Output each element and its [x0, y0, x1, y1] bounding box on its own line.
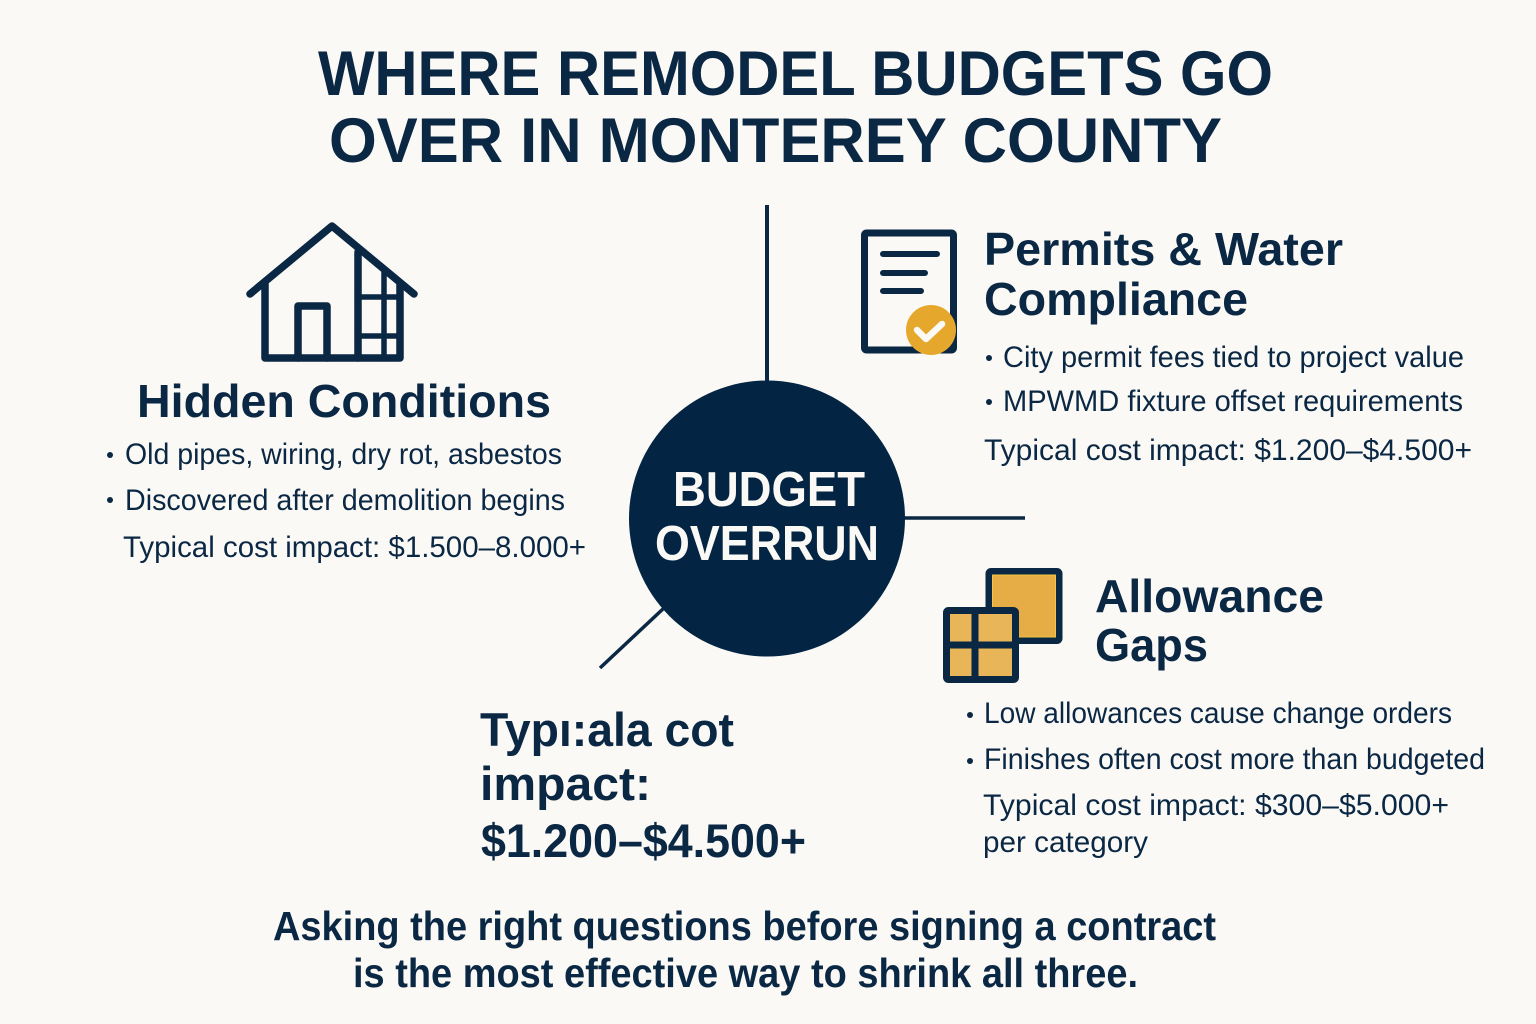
callout: typical cost impact — [480, 703, 806, 867]
connector: to typical cost — [600, 608, 664, 668]
bullet list: Old pipes, wiring, dry rot, asbestos — [125, 438, 562, 471]
footer message: Asking the right questions before signing a contract — [273, 903, 1216, 949]
panel: allowance gaps — [946, 570, 1485, 859]
icon: house with exposed framing — [250, 226, 414, 358]
footer message: is the most effective way to shrink all three. — [353, 950, 1138, 996]
heading: Permits & Water — [984, 223, 1343, 275]
bullet list — [986, 341, 1464, 418]
callout: typical cost impact: $1.200–$4.500+ — [481, 814, 806, 867]
callout: typical cost impact: Typı:ala cot — [480, 703, 734, 756]
title: WHERE REMODEL BUDGETS GO — [318, 39, 1273, 109]
footer message — [273, 903, 1216, 996]
bullet list — [967, 697, 1485, 776]
cost impact: Typical cost impact: $1.200–$4.500+ — [984, 434, 1472, 467]
icon: material swatches — [946, 572, 1059, 680]
bullet list: Finishes often cost more than budgeted — [984, 743, 1485, 776]
bullet list: MPWMD fixture offset requirements — [1003, 385, 1463, 418]
title: OVER IN MONTEREY COUNTY — [329, 106, 1222, 176]
panel: permits and water compliance — [864, 223, 1472, 467]
cost impact: per category — [983, 826, 1148, 859]
cost impact: Typical cost impact: $1.500–8.000+ — [123, 531, 586, 564]
connector: to allowance gaps — [900, 516, 1025, 520]
central hub: budget overrun: BUDGET — [673, 463, 865, 517]
callout: typical cost impact: impact: — [480, 757, 651, 810]
central hub: budget overrun: OVERRUN — [655, 517, 879, 571]
bullet list: Low allowances cause change orders — [984, 697, 1452, 730]
bullet list — [107, 438, 565, 517]
panel: allowance gaps: Gaps — [1095, 619, 1208, 671]
title — [318, 39, 1273, 176]
connector: to permits — [765, 205, 769, 385]
cost impact: Typical cost impact: $300–$5.000+ — [983, 789, 1449, 822]
central hub: budget overrun — [629, 380, 905, 656]
icon: permit document with check — [864, 233, 956, 355]
heading: Allowance — [1095, 570, 1324, 622]
cost impact — [983, 789, 1449, 859]
panel: permits and water compliance: Compliance — [984, 273, 1248, 325]
bullet list: Discovered after demolition begins — [125, 484, 565, 517]
heading: Hidden Conditions — [137, 375, 551, 427]
bullet list: City permit fees tied to project value — [1003, 341, 1464, 374]
panel: hidden conditions — [107, 226, 586, 564]
